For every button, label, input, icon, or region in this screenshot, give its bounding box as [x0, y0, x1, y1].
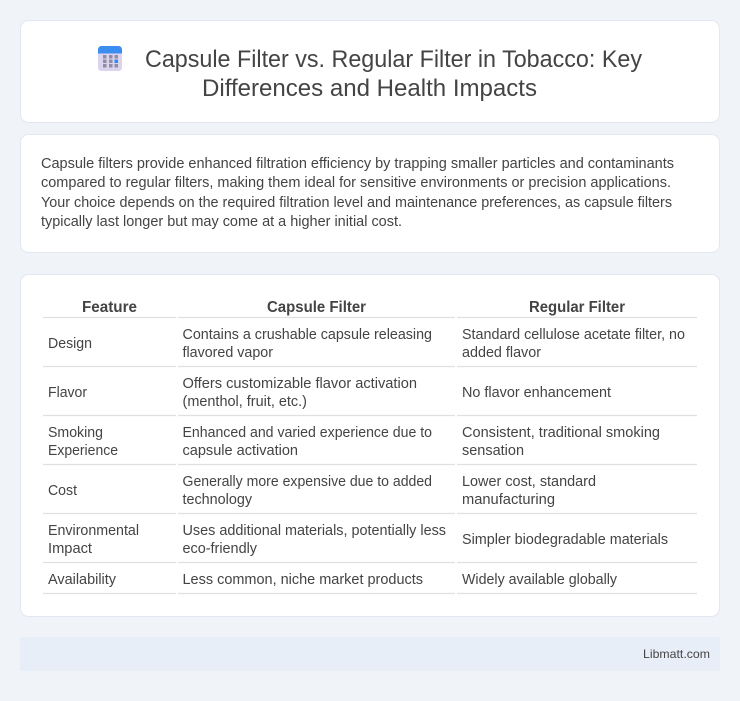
panel: summary paragraph: Capsule filters provide enhanced filtration efficiency by trapping smaller particles and contaminants	[41, 156, 674, 172]
row: environmental impact: Simpler biodegradable materials	[462, 532, 668, 548]
row: environmental impact: eco-friendly	[182, 541, 258, 557]
row: design	[48, 327, 685, 361]
panel: comparison table	[20, 274, 720, 616]
title	[145, 46, 642, 102]
row: environmental impact: Environmental	[48, 523, 139, 539]
table header	[82, 299, 625, 316]
row: cost: Generally more expensive due to added	[182, 474, 432, 490]
icon: calendar grid	[98, 46, 122, 71]
title: Differences and Health Impacts	[202, 75, 537, 102]
panel: summary paragraph: typically last longer but may come at a higher initial cost.	[41, 214, 402, 230]
panel: title card	[20, 20, 720, 122]
row: cost: Cost	[48, 483, 77, 499]
row: environmental impact: Uses additional materials, potentially less	[182, 523, 446, 539]
row: design: Contains a crushable capsule releasing	[182, 327, 432, 343]
row: availability: Widely available globally	[462, 572, 618, 588]
row: environmental impact	[48, 523, 668, 557]
row: availability	[48, 572, 618, 588]
panel: summary paragraph: compared to regular filters, making them ideal for sensitive environments or precision applications.	[41, 175, 671, 191]
row: cost	[48, 474, 596, 508]
row: flavor: Offers customizable flavor activation	[182, 376, 417, 392]
row: availability: Availability	[48, 572, 117, 588]
table header: Feature	[82, 299, 137, 316]
row: design: flavored vapor	[182, 345, 273, 361]
row: flavor: Flavor	[48, 385, 87, 401]
table header: Capsule Filter	[267, 299, 366, 316]
row: smoking experience: capsule activation	[182, 443, 298, 459]
footer: Libmatt.com	[643, 647, 710, 661]
row: flavor: No flavor enhancement	[462, 385, 611, 401]
row: flavor	[48, 376, 611, 410]
table header: Regular Filter	[529, 299, 625, 316]
panel: summary paragraph	[20, 134, 720, 252]
row: design: Design	[48, 336, 92, 352]
footer	[20, 637, 720, 671]
row: smoking experience: Experience	[48, 443, 118, 459]
row: smoking experience: Consistent, traditional smoking	[462, 425, 660, 441]
title: Capsule Filter vs. Regular Filter in Tobacco: Key	[145, 46, 642, 73]
row: availability: Less common, niche market products	[182, 572, 423, 588]
row: cost: manufacturing	[462, 492, 555, 508]
row: smoking experience: sensation	[462, 443, 524, 459]
row: smoking experience: Enhanced and varied experience due to	[182, 425, 432, 441]
row: cost: technology	[182, 492, 253, 508]
row: environmental impact: Impact	[48, 541, 92, 557]
row: smoking experience	[48, 425, 660, 459]
row: smoking experience: Smoking	[48, 425, 103, 441]
row: flavor: (menthol, fruit, etc.)	[182, 394, 307, 410]
row: cost: Lower cost, standard	[462, 474, 596, 490]
row: design: added flavor	[462, 345, 541, 361]
panel: summary paragraph: Your choice depends on the required filtration level and maintenance preferences, as capsule filters	[41, 195, 672, 211]
row: design: Standard cellulose acetate filter, no	[462, 327, 685, 343]
